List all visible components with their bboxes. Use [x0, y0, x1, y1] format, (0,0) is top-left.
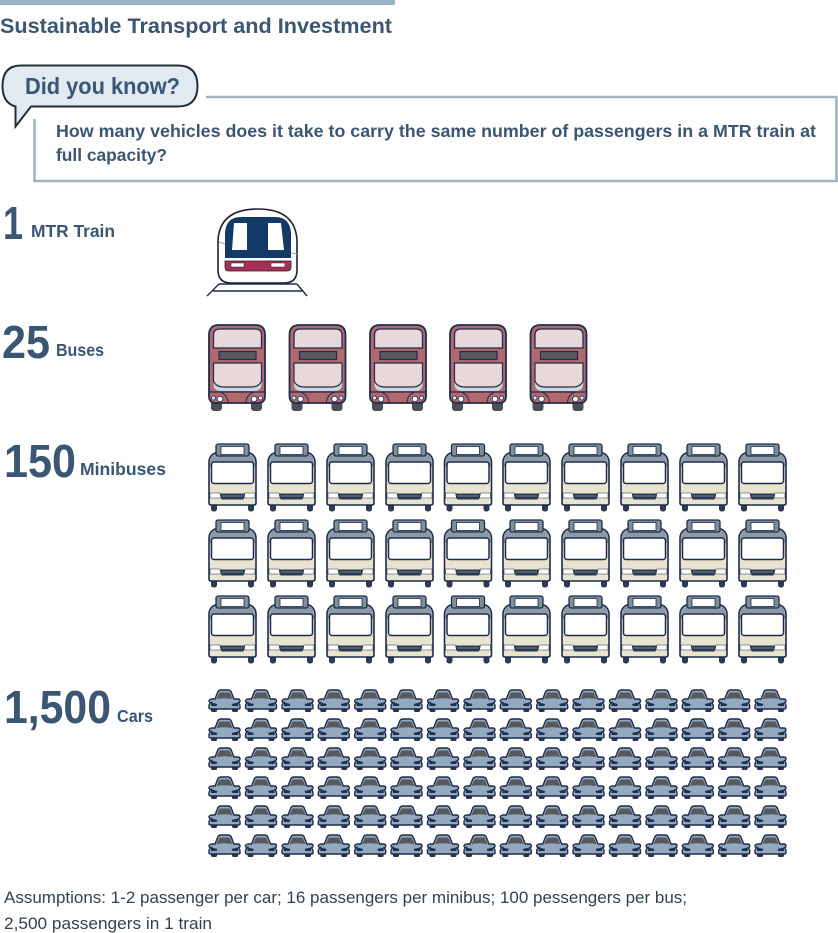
icon row: buses [209, 325, 586, 411]
title: Sustainable Transport and Investment [0, 14, 392, 38]
callout: did you know [2, 66, 836, 181]
row label: 1 MTR Train: 1 [3, 197, 23, 249]
row label: 1,500 Cars: 1,500 [4, 681, 111, 733]
top rule [0, 0, 395, 5]
row label: 150 Minibuses: Minibuses [80, 459, 166, 479]
icon grid: cars [209, 690, 786, 857]
row label: 1 MTR Train [3, 197, 115, 249]
icon: MTR train [207, 209, 307, 296]
row label: 1 MTR Train: MTR Train [31, 221, 115, 241]
question text: How many vehicles does it take to carry the same number of passengers in a MTR train at [56, 121, 816, 141]
speech bubble [2, 66, 198, 126]
icon grid: minibuses [209, 444, 786, 664]
row label: 150 Minibuses: 150 [4, 435, 76, 487]
question box frame [34, 97, 836, 181]
question text: full capacity? [56, 145, 167, 165]
row label: 25 Buses: 25 [2, 316, 50, 368]
bubble heading: Did you know? [25, 73, 180, 99]
row label: 25 Buses [2, 316, 104, 368]
assumptions note: 2,500 passengers in 1 train [4, 915, 212, 933]
row label: 1,500 Cars: Cars [117, 706, 153, 726]
row label: 25 Buses: Buses [56, 340, 104, 360]
row label: 150 Minibuses [4, 435, 166, 487]
assumptions note: Assumptions: 1-2 passenger per car; 16 passengers per minibus; 100 pessengers per bus; [4, 889, 687, 907]
